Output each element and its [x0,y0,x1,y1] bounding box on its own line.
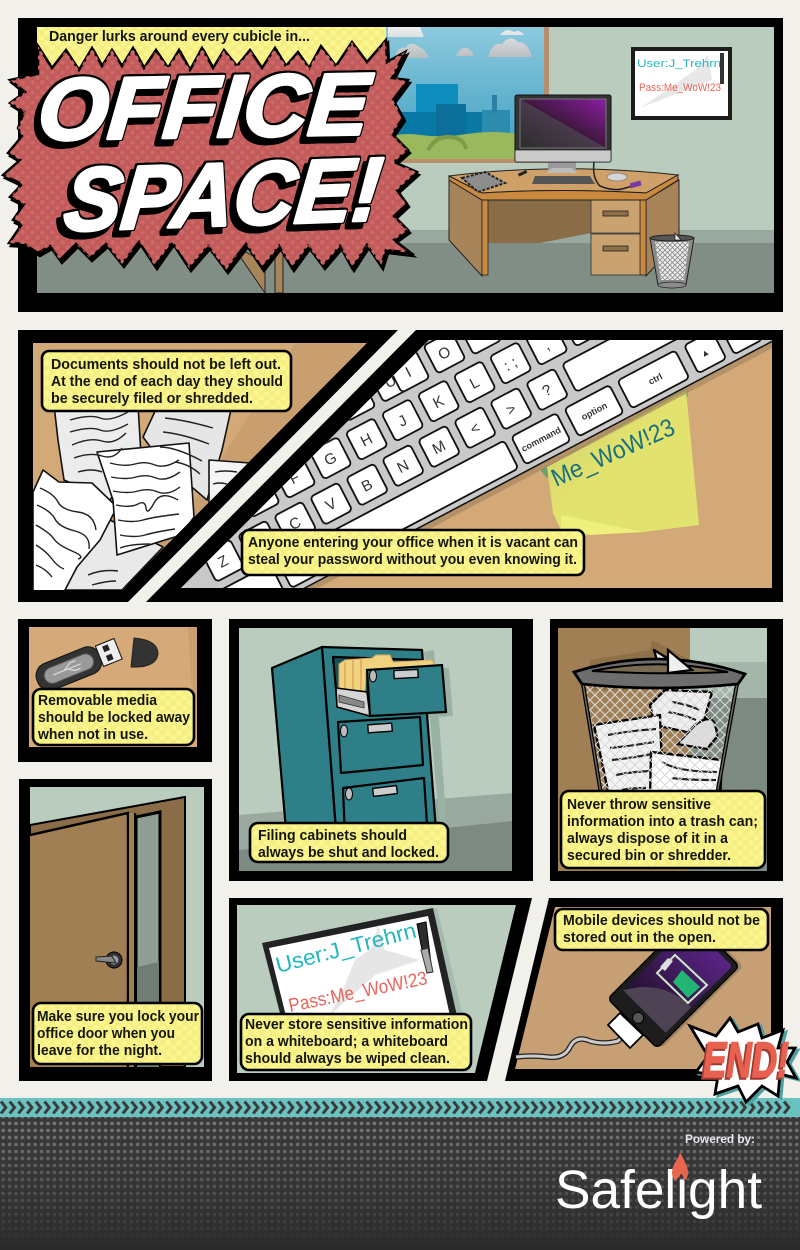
keyboard: I [403,364,414,381]
keyboard: option [580,400,609,422]
open drawer with folders [336,655,446,716]
panel: trash can [550,619,783,881]
keyboard [181,340,772,588]
keyboard: F [287,469,303,488]
keyboard: ▲ [699,346,711,359]
caption: door: Make sure you lock your [37,1008,199,1025]
caption: door: office door when you [37,1025,175,1042]
keyboard: ctrl [647,371,664,387]
caption: password: steal your password without you even knowing it. [248,551,577,568]
panel: removable media [18,619,212,762]
keyboard: B [359,476,376,496]
icon: flame [672,1152,688,1181]
panel: office scene [3,18,783,312]
panel: office door [19,779,212,1081]
keyboard: K [430,392,447,412]
caption: removable media: when not in use. [37,726,148,743]
powered by label: Powered by: [685,1132,755,1146]
caption: documents [42,351,291,411]
caption: removable media: Removable media [38,692,158,709]
caption: door: leave for the night. [37,1042,162,1059]
title: office space: OFFICE [34,54,377,159]
caption: trash: Never throw sensitive [567,796,711,813]
keyboard: C [286,514,304,534]
title: office space [34,54,387,251]
cabinet body [272,647,453,840]
icon: phone connector [608,1013,643,1048]
keyboard: X [251,533,268,553]
caption: whiteboard: on a whiteboard; a whiteboard [245,1033,448,1050]
desk [449,169,679,276]
keyboard: ? [540,381,555,400]
keyboard: Z [215,552,231,572]
caption: documents: Documents should not be left out. [51,356,281,373]
keyboard: M [430,437,449,458]
keyboard: L [467,374,482,393]
caption: documents: be securely filed or shredded. [51,390,253,407]
keyboard: > [503,400,519,420]
caption: whiteboard: should always be wiped clean. [245,1050,450,1067]
caption: trash [561,791,765,868]
title: office space: SPACE! [60,139,387,251]
keyboard: H [358,430,375,451]
footer: safelight branding [0,1117,800,1250]
keyboard: , [541,337,552,354]
caption: filing [250,823,448,862]
caption: trash: always dispose of it in a [567,830,729,847]
caption: door [33,1003,202,1064]
caption: removable media [33,689,194,745]
crumpled papers [594,650,722,800]
keyboard: J [395,412,410,431]
icon: charging cable [516,1033,626,1057]
panel: filing cabinet [229,619,533,881]
paper stack [33,405,250,592]
small trash can [650,233,694,288]
caption: mobile [555,909,768,950]
caption: removable media: should be locked away [38,709,191,726]
keyboard: : ; [501,354,520,375]
panel: keyboard and sticky note [146,330,783,602]
icon: smartphone [608,915,744,1050]
logo wordmark: Safelight [555,1160,762,1220]
tilted whiteboard: Pass:Me_WoW!23 [287,968,429,1017]
panel: scattered documents [18,330,398,602]
door frame and leaf [30,797,185,1067]
whiteboard on wall: Pass:Me_WoW!23 [639,82,721,94]
band: teal chevrons [0,1098,800,1117]
caption: trash: information into a trash can; [567,813,758,830]
end starburst [690,1018,796,1102]
sticky note with password [540,388,699,535]
computer monitor [462,95,642,192]
keyboard: N [394,457,412,477]
sticky note with password: Me_WoW!23 [547,413,679,492]
keyboard: command [520,425,563,454]
caption: mobile: Mobile devices should not be [563,912,760,929]
keyboard: O [435,343,454,364]
panel: mobile device [505,898,783,1081]
caption: mobile: stored out in the open. [563,929,716,946]
keyboard: G [322,449,340,470]
keyboard: < [467,419,483,439]
yellow caption strip: Danger lurks around every cubicle in... [49,28,310,45]
comic starburst [3,40,417,270]
whiteboard on wall: User:J_Trehrn [637,58,721,70]
keyboard: D [250,487,267,508]
caption: filing: always be shut and locked. [258,844,439,861]
caption: whiteboard: Never store sensitive information [245,1016,468,1033]
tilted whiteboard: User:J_Trehrn [273,918,419,978]
caption: password: Anyone entering your office when it is vacant can [248,534,578,551]
waste basket [574,650,745,800]
yellow caption strip [37,27,386,70]
icon: door handle [96,952,122,968]
foreground desk corner [240,252,284,293]
keyboard: U [382,372,399,392]
keyboard: shift [646,324,668,341]
caption: whiteboard [241,1014,471,1070]
icon: usb cap [131,638,158,667]
panel: whiteboard [229,898,532,1081]
window with city view [385,27,549,163]
icon: usb drive [36,638,123,688]
caption: documents: At the end of each day they should [51,373,283,390]
caption: trash: secured bin or shredder. [567,847,731,864]
tilted whiteboard [262,908,462,1013]
keyboard: S [214,506,231,526]
caption: password [242,530,584,575]
keyboard: V [323,495,340,515]
caption: filing: Filing cabinets should [258,827,407,844]
whiteboard on wall [631,47,732,120]
